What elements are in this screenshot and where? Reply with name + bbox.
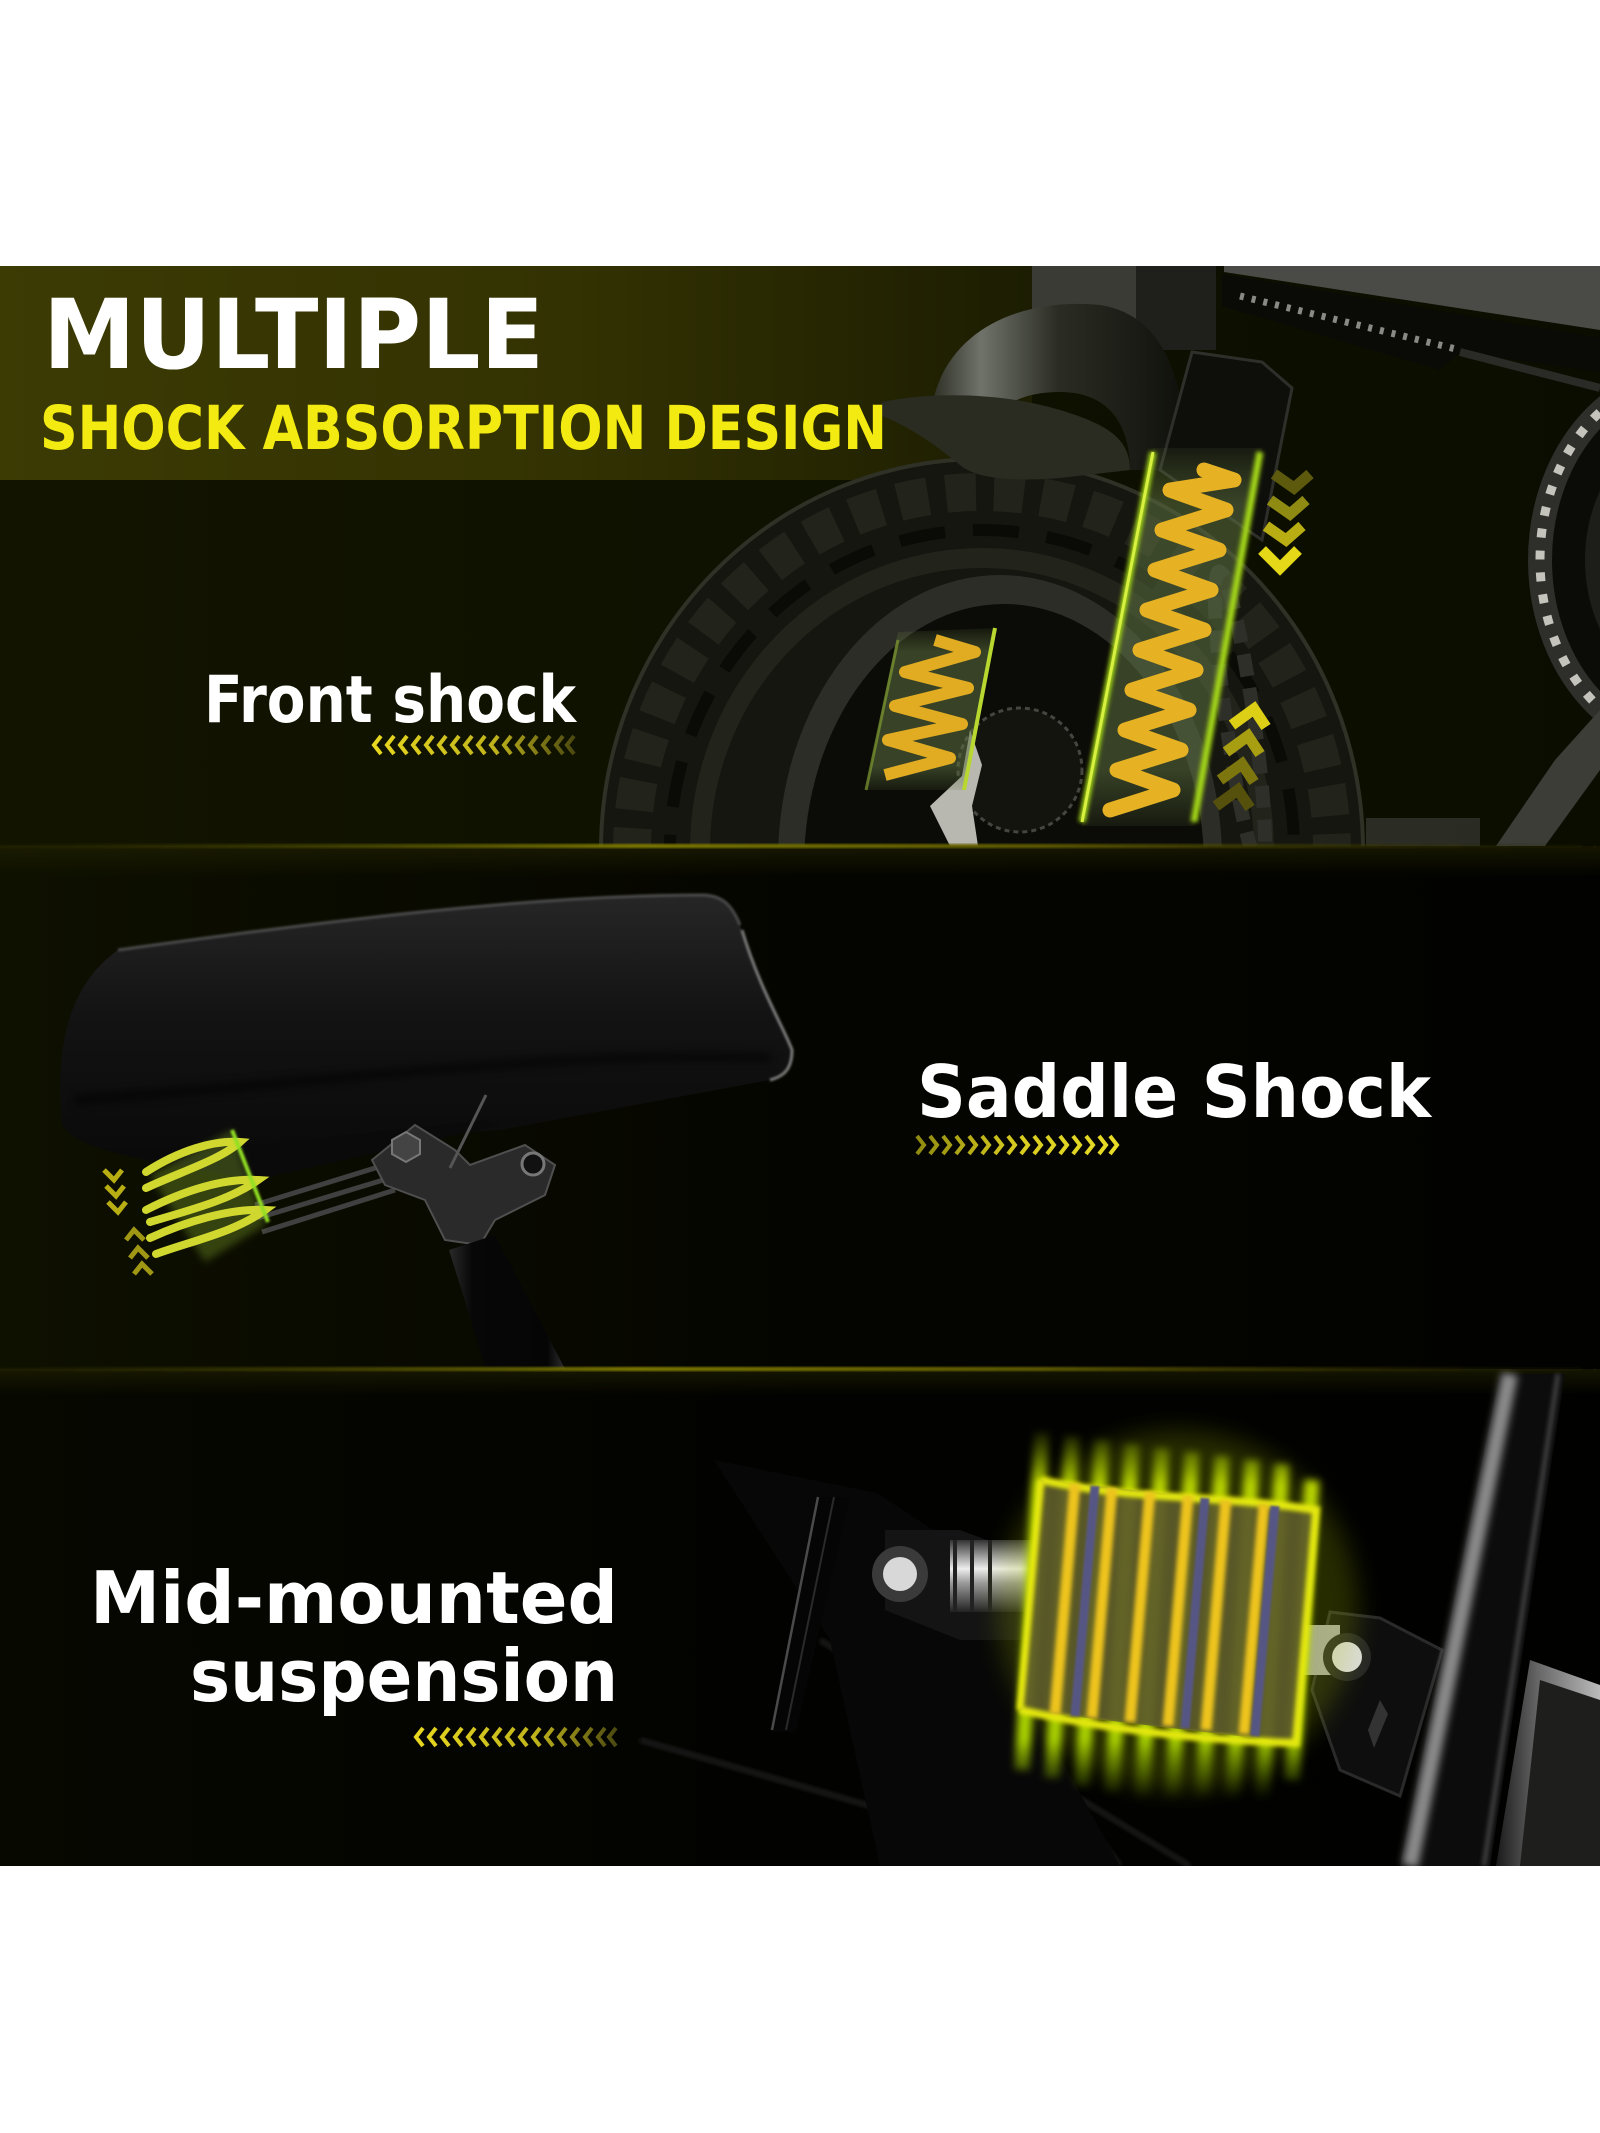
glowing rear spring xyxy=(998,1430,1358,1808)
rear fork spring tube xyxy=(866,628,995,790)
swing arm body xyxy=(714,1460,1120,1866)
label: saddle shock: Saddle Shock xyxy=(917,1050,1433,1134)
panel background xyxy=(0,1369,1600,1866)
left pivot and chrome rod xyxy=(872,1530,1040,1640)
label: front shock: Front shock xyxy=(204,663,578,738)
spring body xyxy=(1020,1480,1316,1743)
upward chevron arrows xyxy=(1216,709,1266,808)
bike frame and battery xyxy=(1032,266,1600,388)
brake disc xyxy=(930,708,1082,846)
flame streaks xyxy=(1022,1432,1312,1808)
lower frame shadows xyxy=(640,1640,1190,1866)
bottom chevron xyxy=(1216,790,1250,808)
saddle spring xyxy=(146,1130,268,1262)
upper middle chevron xyxy=(1226,736,1260,754)
panel background xyxy=(0,266,1600,846)
right bracket xyxy=(1300,1612,1442,1796)
chevron row: suspension xyxy=(416,1728,616,1746)
seat clamp xyxy=(372,1095,555,1245)
upper middle chevron xyxy=(1270,500,1306,514)
saddle xyxy=(60,895,792,1180)
rear sprocket and chain xyxy=(1366,375,1600,846)
front tyre xyxy=(599,458,1365,846)
top chevron xyxy=(1232,709,1266,727)
bottom chevron xyxy=(1262,550,1298,568)
header band xyxy=(0,266,1032,480)
saddle up chevrons xyxy=(126,1230,152,1274)
chevron row: front shock xyxy=(374,736,574,754)
divider: front / saddle xyxy=(0,844,1600,848)
saddle down chevrons xyxy=(104,1170,126,1212)
seat post xyxy=(449,1235,565,1369)
main fork spring tube xyxy=(1082,448,1262,826)
black fork leg xyxy=(1160,352,1292,540)
right silver bracket xyxy=(1496,1660,1600,1866)
panel: mid-mounted suspension xyxy=(0,1369,1600,1866)
top olive fade xyxy=(0,1369,1600,1395)
lower middle chevron xyxy=(1220,764,1254,782)
panel: front shock xyxy=(0,266,1600,846)
infographic canvas xyxy=(0,266,1600,1866)
top chevron xyxy=(1274,474,1310,488)
lower middle chevron xyxy=(1266,526,1302,540)
panel background xyxy=(0,846,1600,1369)
chevron row: saddle shock xyxy=(917,1136,1117,1154)
saddle rails xyxy=(255,1165,395,1232)
downward chevron arrows xyxy=(1262,474,1310,568)
divider: saddle / suspension xyxy=(0,1367,1600,1371)
headline: multiple: MULTIPLE xyxy=(43,279,544,391)
vertical frame tube xyxy=(1400,1374,1565,1866)
black vertical plate xyxy=(770,1497,850,1732)
panel: saddle shock xyxy=(0,846,1600,1369)
mudguard xyxy=(882,395,1130,479)
label: mid-mounted: Mid-mounted xyxy=(90,1556,618,1640)
fender arch xyxy=(930,304,1186,470)
label: suspension: suspension xyxy=(190,1634,618,1718)
top olive fade xyxy=(0,846,1600,864)
subhead: shock absorption design: SHOCK ABSORPTION DESIGN xyxy=(40,393,887,464)
